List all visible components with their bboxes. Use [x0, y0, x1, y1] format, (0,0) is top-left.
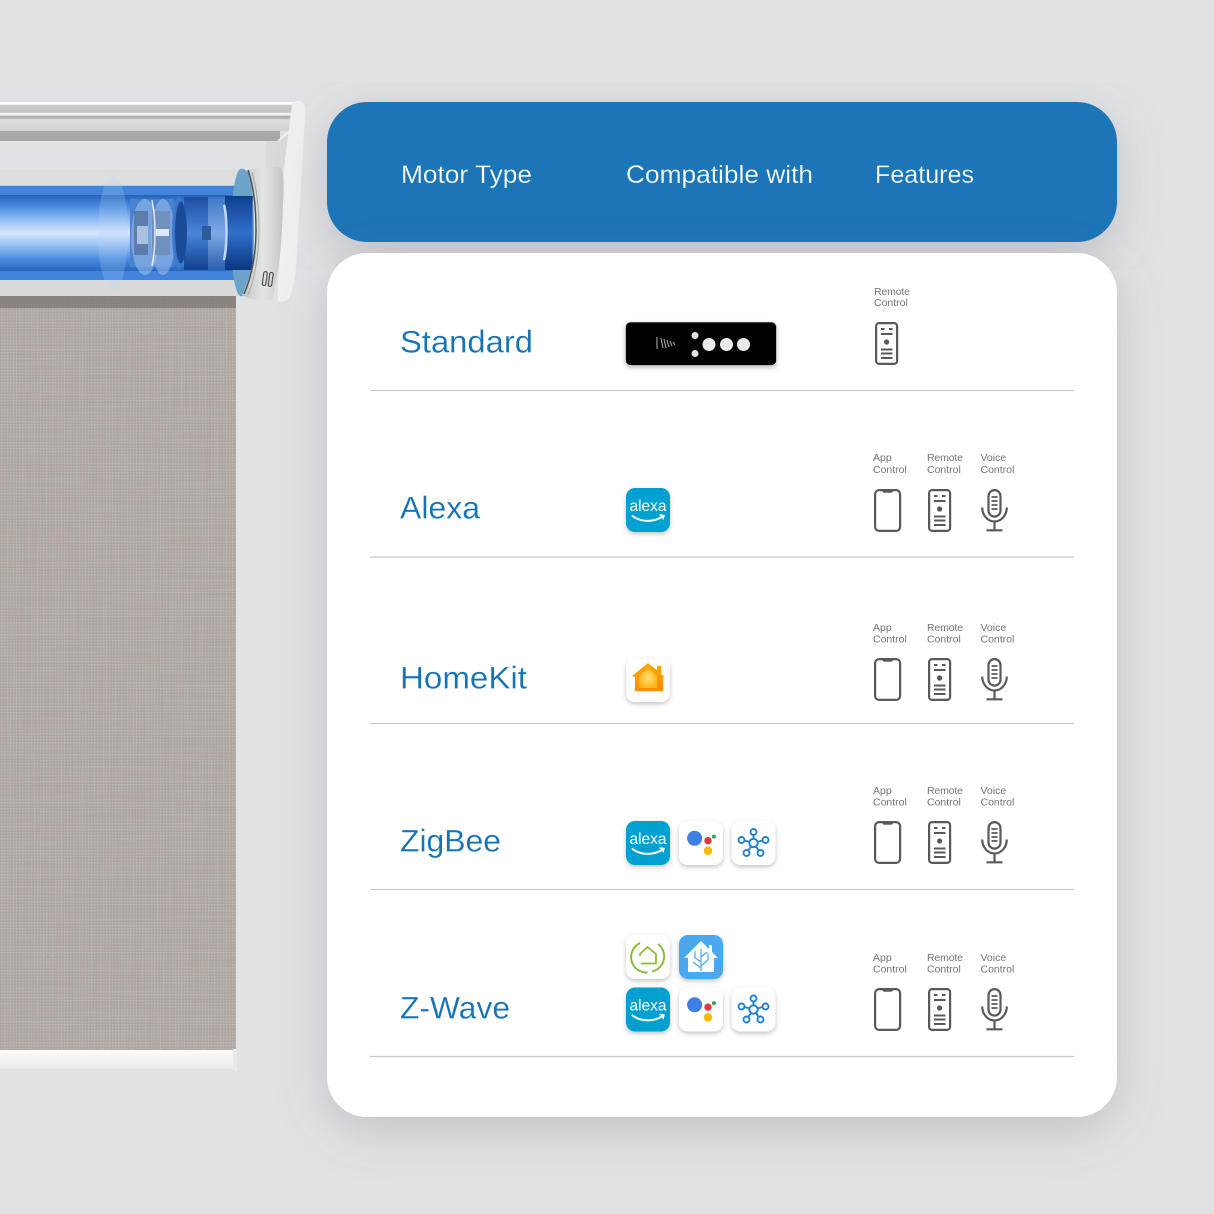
- features: app, remote, voice: [873, 452, 1014, 531]
- heading: Compatible with: Compatible with: [626, 161, 813, 189]
- features: app, remote, voice: Remote: [927, 452, 963, 464]
- features: app, remote, voice: Voice: [980, 785, 1006, 797]
- icon: alexa: [626, 488, 670, 532]
- icons: alexa, google assistant, smart hub: [626, 988, 776, 1032]
- icon: green smart home: [626, 935, 670, 979]
- features: app, remote, voice: Remote: [927, 785, 963, 797]
- table panel: [327, 253, 1117, 1117]
- feature: remote control: Control: [874, 297, 908, 309]
- row: ZigBee: [400, 785, 1014, 865]
- heading: Features: Features: [875, 161, 974, 189]
- roller tube: [0, 169, 248, 296]
- row: Alexa: [400, 452, 1014, 532]
- feature: remote control: Remote: [874, 286, 910, 298]
- features: app, remote, voice: Control: [927, 964, 961, 976]
- row: HomeKit: [400, 622, 1014, 702]
- features: app, remote, voice: [873, 785, 1014, 863]
- features: app, remote, voice: Remote: [927, 622, 963, 634]
- row: Z-Wave: [400, 935, 1014, 1032]
- motor name: Standard: Standard: [400, 324, 533, 360]
- motor name: Z-Wave: Z-Wave: [400, 990, 510, 1026]
- features: app, remote, voice: Voice: [980, 452, 1006, 464]
- features: app, remote, voice: Control: [927, 634, 961, 646]
- features: app, remote, voice: Control: [873, 464, 907, 476]
- end cap: [242, 167, 284, 301]
- features: app, remote, voice: Control: [980, 634, 1014, 646]
- features: app, remote, voice: Control: [873, 964, 907, 976]
- motor internals: [98, 175, 253, 291]
- heading: Motor Type: Motor Type: [401, 161, 532, 189]
- features: app, remote, voice: Control: [927, 796, 961, 808]
- row: Standard: [400, 286, 910, 366]
- motor name: ZigBee: ZigBee: [400, 822, 501, 858]
- features: app, remote, voice: Control: [927, 464, 961, 476]
- feature: remote control: [874, 286, 910, 364]
- features: app, remote, voice: [873, 622, 1014, 700]
- features: app, remote, voice: Remote: [927, 952, 963, 964]
- icon: home assistant: [679, 935, 723, 979]
- features: app, remote, voice: Voice: [980, 622, 1006, 634]
- tube opening: [231, 169, 254, 296]
- features: app, remote, voice: App: [873, 622, 892, 634]
- bottom bar: [0, 1049, 237, 1071]
- features: app, remote, voice: Control: [873, 634, 907, 646]
- motor name: HomeKit: HomeKit: [400, 660, 527, 696]
- roller blind with motor illustration: [0, 101, 306, 1071]
- icon: black remote: [626, 322, 776, 366]
- features: app, remote, voice: Voice: [980, 952, 1006, 964]
- features: app, remote, voice: App: [873, 452, 892, 464]
- features: app, remote, voice: App: [873, 952, 892, 964]
- top rail: [0, 102, 293, 169]
- features: app, remote, voice: Control: [980, 464, 1014, 476]
- features: app, remote, voice: Control: [873, 796, 907, 808]
- end bracket: [278, 101, 306, 302]
- motor name: Alexa: Alexa: [400, 490, 480, 526]
- features: app, remote, voice: [873, 952, 1014, 1030]
- icon: apple home: [626, 658, 670, 702]
- header panel: [327, 102, 1117, 242]
- fabric shade: [0, 296, 236, 1050]
- icons: alexa, google assistant, smart hub: [626, 821, 776, 865]
- features: app, remote, voice: Control: [980, 796, 1014, 808]
- features: app, remote, voice: App: [873, 785, 892, 797]
- features: app, remote, voice: Control: [980, 964, 1014, 976]
